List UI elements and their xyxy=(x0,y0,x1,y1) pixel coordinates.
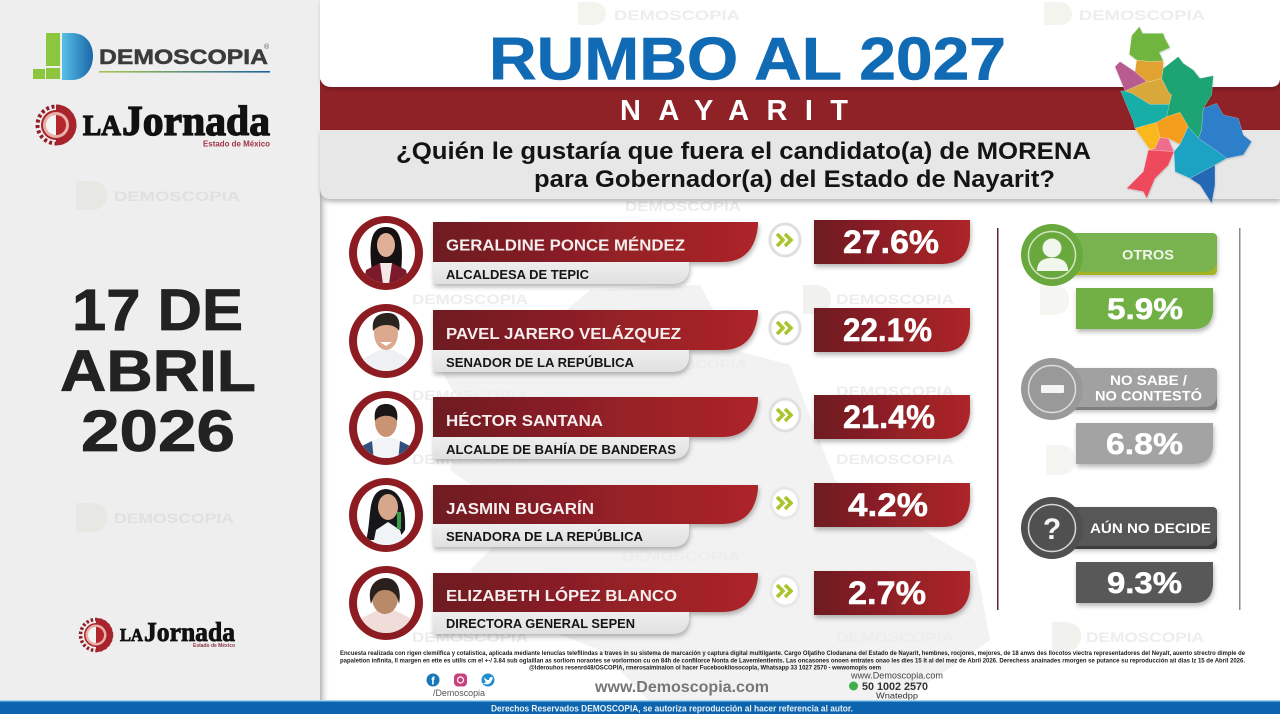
contact block: www.Demoscopia.com xyxy=(850,670,943,682)
role: ALCALDESA DE TEPIC xyxy=(446,267,590,282)
value box xyxy=(814,308,970,352)
icon: question: ? xyxy=(1043,513,1061,546)
role: DIRECTORA GENERAL SEPEN xyxy=(446,616,635,631)
value box xyxy=(814,395,970,439)
portrait xyxy=(349,478,423,552)
role bar xyxy=(433,524,689,547)
value: 21.4% xyxy=(843,399,935,435)
icon: question xyxy=(1021,497,1083,559)
arrow xyxy=(770,399,800,431)
watermarks: DEMOSCOPIA xyxy=(412,451,528,467)
wordmark: DEMOSCOPIA xyxy=(99,46,268,69)
watermarks: DEMOSCOPIA xyxy=(836,451,954,467)
portrait xyxy=(349,216,423,290)
panel: aun no decide xyxy=(1021,497,1217,603)
icon: Demoscopia D xyxy=(33,33,93,80)
value box xyxy=(814,220,970,264)
date: ABRIL xyxy=(60,339,256,404)
label bar xyxy=(1060,507,1217,549)
watermarks: DEMOSCOPIA xyxy=(836,629,954,645)
name bar xyxy=(433,397,758,437)
name bar xyxy=(433,222,758,262)
label: NO CONTESTÓ xyxy=(1095,386,1202,404)
website: www.Demoscopia.com xyxy=(594,679,769,696)
watermarks: DEMOSCOPIA xyxy=(114,510,234,526)
date: 2026 xyxy=(81,399,235,464)
icon: whatsapp xyxy=(849,682,858,690)
wordmark: Jornada xyxy=(122,99,270,145)
value: 5.9% xyxy=(1107,293,1183,326)
wordmark small: Jornada xyxy=(144,617,235,647)
name: PAVEL JARERO VELÁZQUEZ xyxy=(446,324,681,343)
label: AÚN NO DECIDE xyxy=(1090,519,1211,536)
panel: otros xyxy=(1021,224,1217,329)
watermarks: DEMOSCOPIA xyxy=(1086,629,1204,645)
watermarks: DEMOSCOPIA xyxy=(836,383,954,399)
value: 6.8% xyxy=(1106,428,1183,461)
name: JASMIN BUGARÍN xyxy=(446,499,594,518)
name: ELIZABETH LÓPEZ BLANCO xyxy=(446,586,677,605)
date: 17 DE xyxy=(72,278,243,343)
watermarks: DEMOSCOPIA xyxy=(412,387,528,403)
logo: La Jornada small: Estado de México xyxy=(193,643,236,649)
role: ALCALDE DE BAHÍA DE BANDERAS xyxy=(446,442,676,457)
white title band xyxy=(320,0,1280,87)
wordmark small: LA xyxy=(120,625,143,645)
icon: minus xyxy=(1021,358,1083,420)
role bar xyxy=(433,350,689,372)
watermarks: DEMOSCOPIA xyxy=(412,291,528,307)
footer bar xyxy=(0,700,1280,714)
footer bar: Derechos Reservados DEMOSCOPIA, se autoriza reproducción al hacer referencia al autor. xyxy=(491,704,853,714)
portrait xyxy=(349,566,423,640)
icon: gear small xyxy=(80,618,113,652)
divider lines xyxy=(997,228,1240,610)
label xyxy=(1095,372,1202,404)
header watermarks: DEMOSCOPIA xyxy=(614,7,740,23)
logo: La Jornada: Estado de México xyxy=(203,138,270,148)
subtitle: NAYARIT xyxy=(620,95,848,127)
name bar xyxy=(433,310,758,350)
logo: Demoscopia xyxy=(33,33,270,80)
value: 9.3% xyxy=(1107,567,1182,600)
social icons xyxy=(426,674,494,698)
role: SENADOR DE LA REPÚBLICA xyxy=(446,355,635,370)
value box xyxy=(814,483,970,527)
header watermarks: DEMOSCOPIA xyxy=(1079,7,1205,23)
panel: no sabe xyxy=(1021,358,1217,464)
name: HÉCTOR SANTANA xyxy=(446,411,603,430)
candidate row 3 xyxy=(349,391,970,465)
label bar xyxy=(1060,368,1217,410)
logo: La Jornada small xyxy=(80,617,236,652)
value box xyxy=(1076,423,1213,464)
wordmark: LA xyxy=(83,110,121,142)
label bar xyxy=(1060,233,1217,275)
value: 22.1% xyxy=(843,312,932,348)
watermarks xyxy=(76,181,1204,651)
title: RUMBO AL 2027 xyxy=(489,26,1006,92)
value: 4.2% xyxy=(848,487,928,523)
candidate row 2 xyxy=(349,304,970,378)
icon: person xyxy=(1021,224,1083,286)
watermarks: DEMOSCOPIA xyxy=(114,188,240,204)
header watermarks xyxy=(578,2,1205,25)
role bar xyxy=(433,437,689,459)
arrow xyxy=(771,576,799,606)
role bar xyxy=(433,612,689,634)
methodology note: @lderouhos resenrd48/OSCOPIA, rmerosaiminalon ol hacer Fucebookliosocopla, Whatsapp 33 1027 2570 - wwwomopls oem xyxy=(529,664,881,672)
contact block: 50 1002 2570 xyxy=(862,681,928,693)
icon: twitter xyxy=(482,674,494,686)
arrow xyxy=(771,488,799,518)
question: ¿Quién le gustaría que fuera el candidato(a) de MORENA xyxy=(396,138,1091,165)
logo: Demoscopia: ® xyxy=(264,43,270,51)
map of Nayarit xyxy=(1115,27,1252,203)
background map silhouette xyxy=(435,285,990,702)
label: NO SABE / xyxy=(1110,372,1187,388)
arrow xyxy=(770,312,800,344)
watermarks: DEMOSCOPIA xyxy=(622,548,740,564)
arrow xyxy=(770,224,800,256)
name bar xyxy=(433,485,758,524)
candidate row 1 xyxy=(349,216,970,290)
candidate row 5 xyxy=(349,566,970,640)
value: 2.7% xyxy=(848,575,926,611)
watermarks: DEMOSCOPIA xyxy=(836,291,954,307)
question xyxy=(396,138,1091,193)
candidate row 4 xyxy=(349,478,970,552)
watermarks: DEMOSCOPIA xyxy=(412,629,528,645)
contact block xyxy=(849,670,943,700)
contact block: Wnatedpp xyxy=(876,690,918,700)
watermarks: DEMOSCOPIA xyxy=(635,356,747,372)
icon: facebook: f xyxy=(431,676,435,688)
portrait xyxy=(349,391,423,465)
role bar xyxy=(433,262,689,284)
icon: instagram xyxy=(454,674,467,686)
watermarks: DEMOSCOPIA xyxy=(625,198,741,214)
value box xyxy=(1076,562,1213,603)
question: para Gobernador(a) del Estado de Nayarit? xyxy=(534,166,1055,193)
handle: /Demoscopia xyxy=(433,688,485,698)
methodology note xyxy=(340,650,1245,672)
sidebar panel xyxy=(0,0,330,702)
red band xyxy=(320,80,1280,130)
value box xyxy=(814,571,970,615)
value box xyxy=(1076,288,1213,329)
grey question band xyxy=(320,130,1280,199)
portrait xyxy=(349,304,423,378)
name bar xyxy=(433,573,758,612)
name: GERALDINE PONCE MÉNDEZ xyxy=(446,236,685,254)
date xyxy=(60,278,256,464)
logo: La Jornada xyxy=(38,99,270,148)
label: OTROS xyxy=(1122,246,1174,262)
role: SENADORA DE LA REPÚBLICA xyxy=(446,529,644,544)
icon: gear xyxy=(38,104,76,146)
value: 27.6% xyxy=(843,224,939,260)
header panel xyxy=(320,0,1280,199)
